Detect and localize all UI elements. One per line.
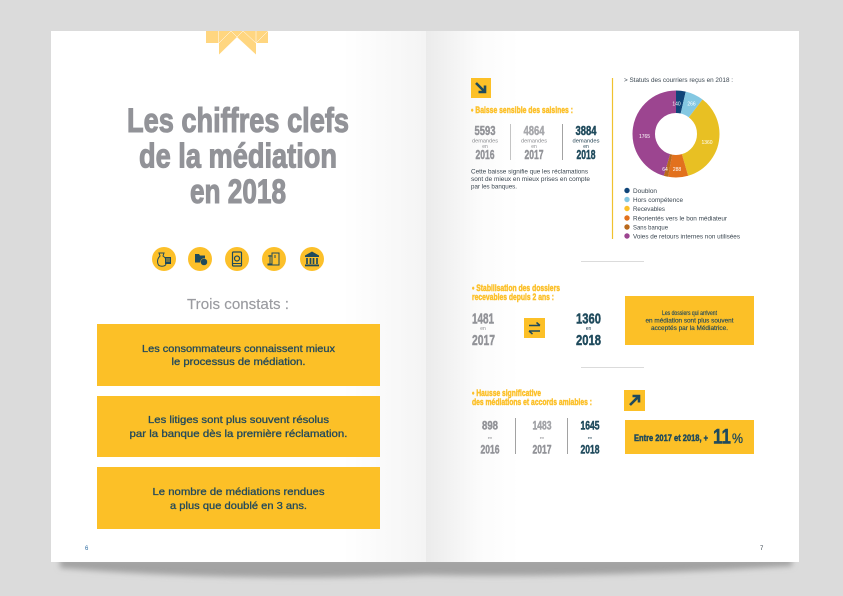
- donut value labels: 140: [672, 102, 681, 108]
- figure 2018: 2018: [580, 444, 600, 456]
- title: [127, 102, 349, 211]
- heading: hausse significative: [472, 388, 592, 407]
- figure 2016: [472, 124, 499, 162]
- icon: arrow down-right: [471, 78, 491, 98]
- donut value labels: 1765: [639, 134, 650, 140]
- left page: [51, 31, 426, 562]
- page number 6: 6: [85, 546, 89, 552]
- section: baisse des saisines: [471, 78, 600, 190]
- section: stabilisation: [472, 283, 754, 349]
- figure 2016: en: [488, 435, 492, 440]
- chart heading: > Statuts des courriers reçus en 2018 :: [624, 77, 733, 84]
- legend: Voies de retours internes non utilisées: [633, 234, 741, 240]
- figure 2017: en: [531, 144, 537, 150]
- figure 2017: 4864: [524, 124, 545, 138]
- callout: plus 11 %: [625, 420, 754, 454]
- donut value labels: [639, 102, 713, 173]
- figure 2016: 2016: [480, 444, 500, 456]
- explanatory text: Cette baisse signifie que les réclamations: [471, 168, 589, 176]
- donut value labels: 266: [687, 102, 696, 108]
- legend: Sans banque: [633, 224, 668, 232]
- figure 1481 in 2017: en: [480, 326, 486, 332]
- legend: Recevables: [633, 206, 666, 213]
- heading: stabilisation: [472, 283, 560, 302]
- donut value labels: 288: [673, 167, 681, 173]
- legend: Hors compétence: [633, 197, 683, 204]
- figure 2018: en: [588, 435, 592, 440]
- figure 2016: demandes: [472, 138, 499, 144]
- callout: plus 11 %: %: [732, 430, 743, 446]
- finding box 2: [97, 396, 380, 457]
- callout: plus 11 %: Entre 2017 et 2018, +: [634, 433, 708, 443]
- legend: Doublon: [633, 188, 657, 195]
- finding box 1: le processus de médiation.: [172, 356, 306, 368]
- section: statuts des courriers: [612, 77, 741, 240]
- heading: hausse significative: des médiations et accords amiables :: [472, 397, 592, 407]
- figure 2018: 3884: [576, 124, 597, 138]
- section: hausse: [472, 388, 754, 456]
- right page: [426, 31, 799, 562]
- figure 2017: en: [540, 435, 544, 440]
- figure 1360 in 2018: 2018: [576, 332, 601, 349]
- figure 2016: 898: [482, 420, 499, 432]
- legend: [624, 188, 741, 240]
- ribbon decoration: [206, 31, 268, 54]
- heading: stabilisation: • Stabilisation des dossiers: [472, 283, 560, 293]
- finding box 3: Le nombre de médiations rendues: [152, 486, 324, 498]
- icon: arrow up-right: [624, 390, 645, 411]
- icon row: [152, 247, 324, 271]
- donut value labels: 1360: [701, 140, 713, 146]
- figure 2017: [521, 124, 548, 162]
- figure 2018: en: [583, 144, 589, 150]
- heading: hausse significative: • Hausse significative: [472, 388, 541, 398]
- finding box 1: [97, 324, 380, 386]
- page number 7: 7: [760, 546, 764, 552]
- finding box 1: Les consommateurs connaissent mieux: [142, 343, 336, 355]
- icon: folder with euro: [188, 247, 212, 271]
- finding box 3: a plus que doublé en 3 ans.: [170, 500, 307, 512]
- subheading: trois constats: Trois constats :: [187, 297, 289, 313]
- finding box 3: [97, 467, 380, 529]
- figure 2017: 2017: [532, 444, 552, 456]
- legend: Réorientés vers le bon médiateur: [633, 216, 728, 222]
- heading: baisse sensible: • Baisse sensible des saisines :: [471, 105, 573, 115]
- figure 1360 in 2018: 1360: [576, 310, 601, 328]
- book shadow: [60, 558, 792, 577]
- callout: dossiers acceptés: [625, 296, 754, 345]
- figure 1481 in 2017: [472, 310, 495, 349]
- figure 2018: [580, 420, 600, 456]
- figure 2016: [480, 420, 500, 456]
- donut chart: [644, 102, 708, 166]
- figure 2017: demandes: [521, 138, 548, 144]
- icon: exchange arrows: [524, 318, 545, 338]
- figure 2016: en: [482, 144, 488, 150]
- finding box 2: Les litiges sont plus souvent résolus: [148, 414, 329, 426]
- figure 2017: [532, 420, 552, 456]
- heading: stabilisation: recevables depuis 2 ans :: [472, 292, 554, 302]
- figure 1360 in 2018: [576, 310, 601, 349]
- donut value labels: 64: [662, 167, 668, 173]
- title: en 2018: [190, 173, 286, 211]
- figure 1360 in 2018: en: [586, 326, 591, 332]
- figure 1481 in 2017: 2017: [472, 332, 495, 349]
- figure 2016: 5593: [474, 124, 496, 138]
- explanatory text: par les banques.: [471, 184, 517, 190]
- figure 1481 in 2017: 1481: [472, 310, 494, 328]
- title: de la médiation: [139, 138, 337, 176]
- figure 2018: 2018: [576, 148, 596, 162]
- figure 2018: demandes: [572, 138, 600, 144]
- title: Les chiffres clefs: [127, 102, 349, 140]
- figure 2018: [572, 124, 600, 162]
- callout: dossiers acceptés: Les dossiers qui arrivent: [662, 311, 717, 317]
- finding box 2: par la banque dès la première réclamation.: [130, 428, 348, 440]
- figure 2016: 2016: [476, 148, 495, 162]
- explanatory text: [471, 168, 590, 190]
- icon: document and scales: [262, 247, 286, 271]
- icon: bank: [300, 247, 324, 271]
- callout: plus 11 %: 11: [713, 426, 731, 448]
- icon: money bag: [152, 247, 176, 271]
- figure 2017: 2017: [524, 148, 544, 162]
- explanatory text: sont de mieux en mieux prises en compte: [471, 176, 590, 183]
- icon: smartphone with euro: [225, 247, 249, 271]
- figure 2017: 1483: [532, 420, 552, 432]
- callout: dossiers acceptés: acceptés par la Médiatrice.: [651, 326, 728, 332]
- callout: dossiers acceptés: en médiation sont plus souvent: [646, 318, 734, 324]
- figure 2018: 1645: [580, 420, 600, 432]
